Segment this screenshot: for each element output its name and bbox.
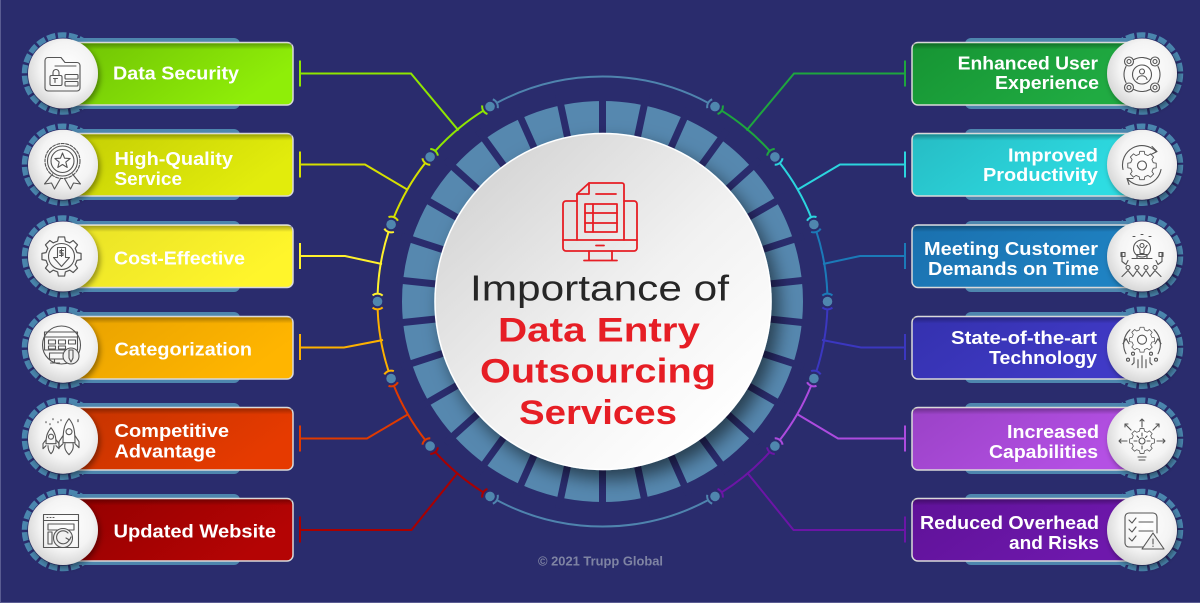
card: improved productivity	[912, 126, 1180, 203]
connector: improved productivity	[797, 152, 905, 190]
title	[470, 268, 730, 432]
icon: gear with cycle arrows	[1122, 146, 1161, 185]
card: increased capabilities: Capabilities	[989, 441, 1098, 462]
card: state-of-the-art technology: State-of-the-art	[951, 327, 1097, 348]
outer arc: top	[493, 77, 712, 108]
card: cost-effective	[24, 218, 293, 295]
card: meeting customer demands on time: Meeting Customer	[924, 238, 1098, 259]
icon: checklist with warning	[1125, 513, 1164, 549]
card: competitive advantage: Competitive	[114, 420, 229, 441]
icon: quality badge	[44, 144, 80, 189]
icon: secure folder	[45, 58, 80, 91]
icon: browser with refresh	[44, 514, 78, 548]
connector: increased capabilities	[797, 414, 905, 452]
connector: high-quality service	[300, 152, 408, 190]
connector: competitive advantage	[300, 414, 408, 452]
card: improved productivity: Productivity	[983, 164, 1099, 185]
title: Services	[519, 394, 677, 432]
card: reduced overhead and risks	[912, 492, 1180, 568]
card: increased capabilities: Increased	[1007, 421, 1099, 442]
card: competitive advantage: Advantage	[114, 441, 216, 462]
outer arc: left coloured sections	[373, 105, 489, 498]
icon: categorised grid with pencil	[42, 326, 80, 364]
connector: enhanced user experience	[746, 60, 905, 130]
connector: reduced overhead and risks	[748, 473, 905, 542]
segmented blue ring	[392, 90, 813, 513]
connector: state-of-the-art technology	[822, 334, 905, 360]
card: categorization: Categorization	[114, 339, 252, 360]
card: data security: Data Security	[113, 62, 240, 84]
outer arc: right coloured sections	[716, 105, 832, 498]
icon: red monitor with document	[563, 183, 637, 260]
outer arc: bottom	[493, 495, 712, 526]
card: updated website	[24, 492, 293, 568]
card: data security	[24, 35, 293, 112]
title: Outsourcing	[480, 353, 716, 391]
card: enhanced user experience	[912, 35, 1180, 112]
icon: user in network	[1124, 57, 1160, 92]
icon: gear with dollar arrow	[42, 237, 81, 276]
card: high-quality service: Service	[114, 168, 182, 189]
card: improved productivity: Improved	[1008, 145, 1098, 166]
connector: cost-effective	[300, 243, 382, 269]
icon: speaker and audience	[1121, 234, 1163, 276]
card: meeting customer demands on time: Demands on Time	[928, 258, 1099, 279]
copyright: © 2021 Trupp Global	[538, 555, 663, 569]
card: high-quality service: High-Quality	[114, 148, 234, 169]
card: cost-effective: Cost-Effective	[114, 248, 245, 269]
title: Importance of	[470, 268, 730, 308]
card: increased capabilities	[912, 400, 1180, 477]
central white disc	[435, 134, 771, 470]
card: high-quality service	[24, 126, 293, 203]
card: competitive advantage	[24, 400, 293, 477]
card: enhanced user experience: Enhanced User	[958, 52, 1098, 73]
card: state-of-the-art technology	[912, 309, 1180, 386]
card: categorization	[24, 309, 293, 386]
title: Data Entry	[498, 312, 700, 350]
icon: idea gear with arrows	[1119, 419, 1165, 460]
card: meeting customer demands on time	[912, 218, 1180, 295]
connector: updated website	[300, 473, 458, 542]
card: enhanced user experience: Experience	[995, 72, 1099, 93]
icon: gear and circuit	[1123, 327, 1161, 368]
card: reduced overhead and risks: Reduced Overhead	[920, 512, 1099, 533]
card: state-of-the-art technology: Technology	[989, 347, 1098, 368]
connector: meeting customer demands	[823, 243, 905, 269]
arc node dots	[373, 102, 832, 501]
icon: two rockets	[43, 419, 79, 455]
card: reduced overhead and risks: and Risks	[1009, 532, 1099, 553]
connector: categorization	[300, 334, 383, 360]
card: updated website: Updated Website	[114, 521, 276, 542]
connector: data security	[300, 60, 458, 130]
